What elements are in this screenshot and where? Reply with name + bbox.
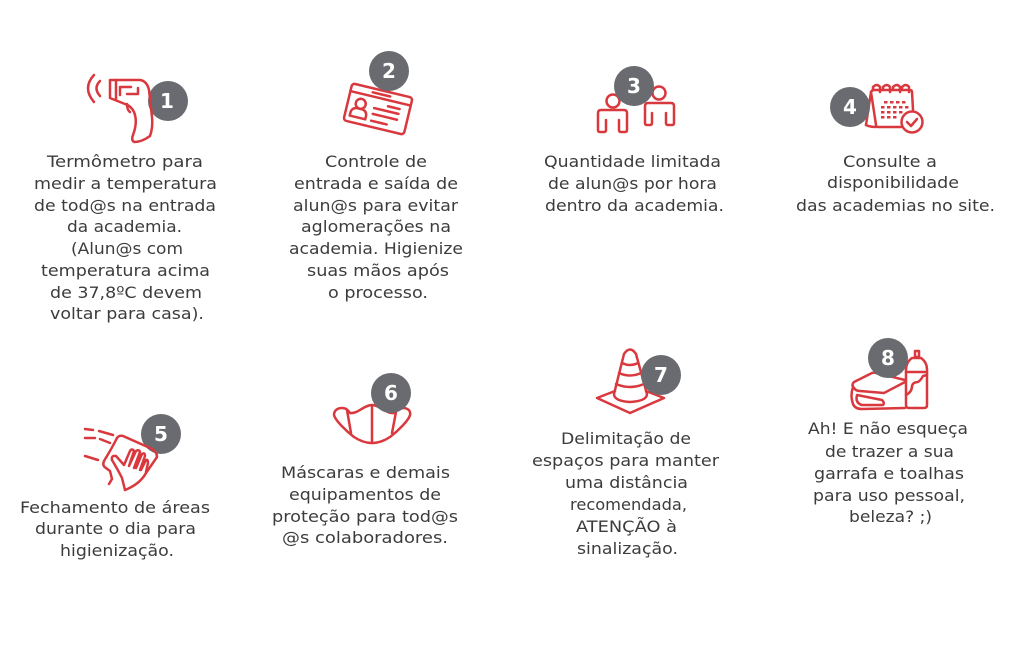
text: availability description: disponibilidade <box>827 173 959 192</box>
text: entry control description <box>289 152 463 302</box>
badge: 3 <box>614 66 654 106</box>
text: thermometer description: de 37,8ºC devem <box>50 283 202 302</box>
text: entry control description: entrada e saída de <box>294 174 458 193</box>
text: limited students description: de alun@s por hora <box>548 174 717 193</box>
panel: 3 limited students <box>544 66 724 215</box>
text: limited students description: Quantidade limitada <box>544 152 721 171</box>
text: availability description: das academias no site. <box>796 196 995 215</box>
text: availability description: Consulte a <box>843 152 937 171</box>
text: area closure description <box>20 498 210 560</box>
badge: 1: 1 <box>160 89 174 113</box>
text: entry control description: suas mãos após <box>307 261 449 280</box>
text: thermometer description <box>34 152 217 323</box>
text: distancing description <box>532 429 719 558</box>
icon: traffic cone <box>597 350 664 413</box>
text: limited students description: dentro da academia. <box>545 196 724 215</box>
badge: 5 <box>141 414 181 454</box>
text: thermometer description: temperatura acima <box>41 261 210 280</box>
text: distancing description: Delimitação de <box>561 429 691 448</box>
text: bottle and towel description: Ah! E não esqueça <box>808 419 968 438</box>
panel: 8 bottle and towel <box>808 338 968 526</box>
panel: 1 thermometer <box>34 75 217 323</box>
text: limited students description <box>544 152 724 215</box>
text: bottle and towel description <box>808 419 968 526</box>
icon: bottle and towel <box>852 351 927 409</box>
text: bottle and towel description: para uso pessoal, <box>813 486 965 505</box>
panel: 4 check availability <box>796 85 995 215</box>
badge: 2: 2 <box>382 59 396 83</box>
text: entry control description: academia. Higienize <box>289 239 463 258</box>
badge: 2 <box>369 51 409 91</box>
badge: 4: 4 <box>843 95 857 119</box>
text: thermometer description: medir a temperatura <box>34 174 217 193</box>
panel: 6 masks <box>272 373 458 547</box>
badge: 8 <box>868 338 908 378</box>
text: thermometer description: da academia. <box>67 217 182 236</box>
badge: 6 <box>371 373 411 413</box>
icon: calendar with check <box>866 85 922 132</box>
panel: 5 area closure <box>20 414 210 560</box>
text: thermometer description: (Alun@s com <box>71 239 183 258</box>
badge: 5: 5 <box>154 422 168 446</box>
text: distancing description: ATENÇÃO à <box>576 517 677 536</box>
icon: ID card <box>343 83 413 135</box>
icon: infrared thermometer <box>88 75 152 142</box>
panel: 7 cone <box>532 350 719 558</box>
text: entry control description: aglomerações na <box>301 217 451 236</box>
badge: 6: 6 <box>384 381 398 405</box>
text: masks description <box>272 463 458 547</box>
text: entry control description: Controle de <box>325 152 427 171</box>
badge: 3: 3 <box>627 74 641 98</box>
badge: 7: 7 <box>654 363 668 387</box>
icon: two people <box>598 86 674 132</box>
text: masks description: equipamentos de <box>289 485 441 504</box>
text: distancing description: recomendada, <box>570 495 687 514</box>
text: bottle and towel description: de trazer a sua <box>825 442 954 461</box>
text: entry control description: alun@s para evitar <box>293 196 458 215</box>
text: thermometer description: de tod@s na entrada <box>34 196 216 215</box>
text: availability description <box>796 152 995 215</box>
text: masks description: @s colaboradores. <box>282 528 448 547</box>
badge: 8: 8 <box>881 346 895 370</box>
badge: 1 <box>148 81 188 121</box>
text: distancing description: espaços para manter <box>532 451 719 470</box>
text: entry control description: o processo. <box>328 283 428 302</box>
badge: 7 <box>641 355 681 395</box>
icon: hand wiping with cloth <box>85 429 157 490</box>
text: thermometer description: Termômetro para <box>46 152 203 171</box>
badge: 4 <box>830 87 870 127</box>
panel: 2 entry control <box>289 51 463 302</box>
text: area closure description: higienização. <box>60 541 174 560</box>
text: masks description: proteção para tod@s <box>272 507 458 526</box>
text: distancing description: uma distância <box>565 473 688 492</box>
text: area closure description: durante o dia para <box>35 519 196 538</box>
text: masks description: Máscaras e demais <box>281 463 450 482</box>
text: area closure description: Fechamento de áreas <box>20 498 210 517</box>
text: bottle and towel description: garrafa e toalhas <box>814 464 964 483</box>
icon: face mask <box>334 405 410 443</box>
text: thermometer description: voltar para casa). <box>50 304 204 323</box>
text: bottle and towel description: beleza? ;) <box>849 507 932 526</box>
text: distancing description: sinalização. <box>577 539 678 558</box>
